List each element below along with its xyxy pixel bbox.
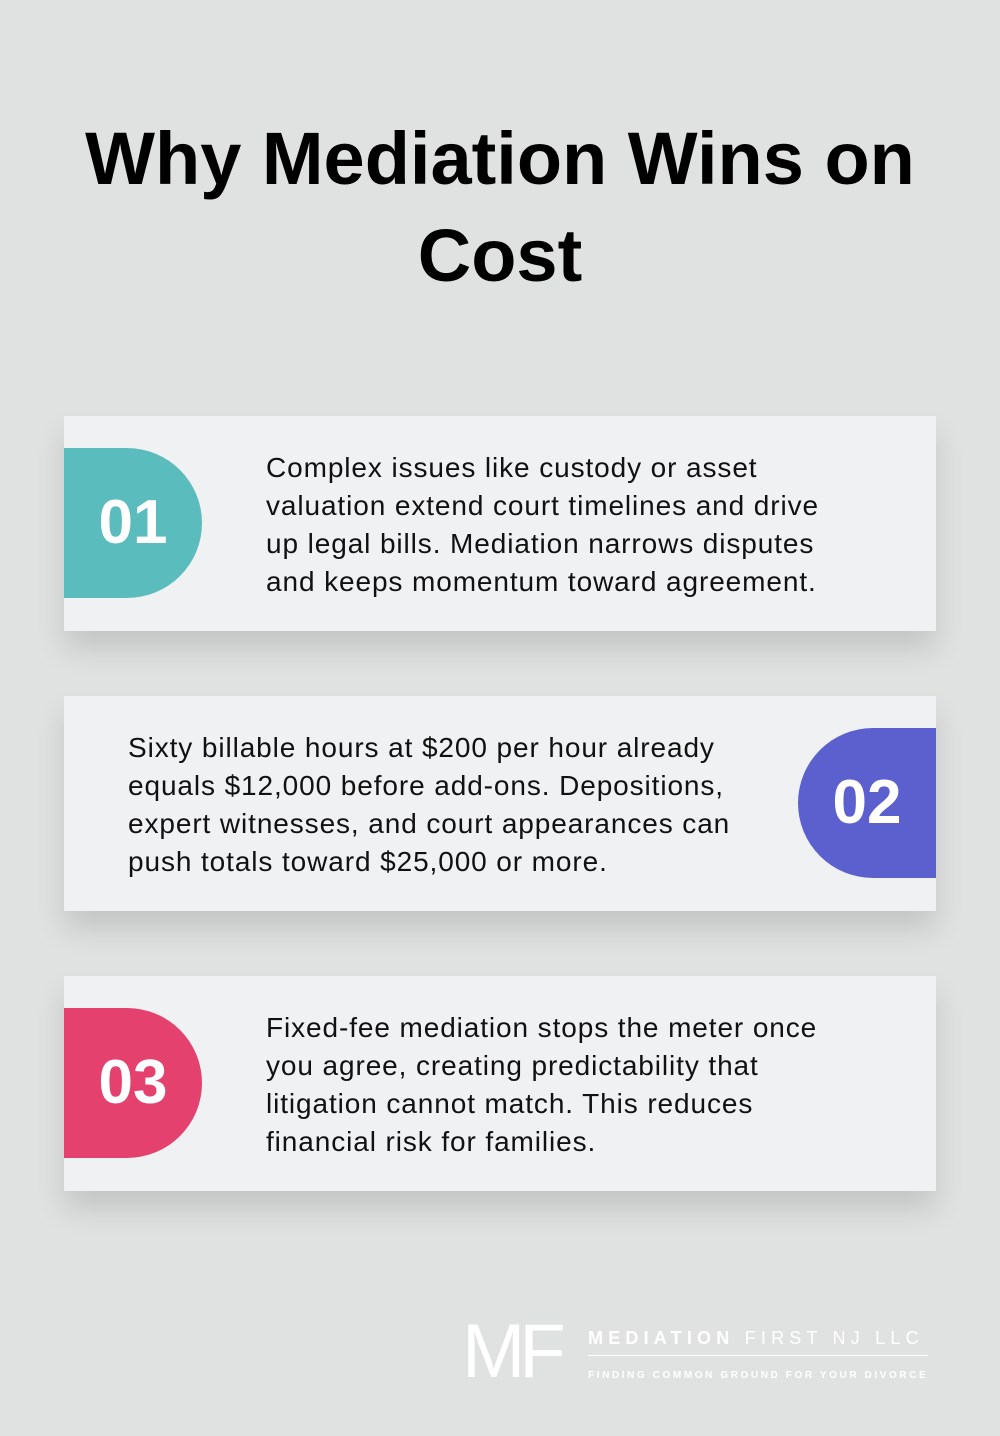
badge 01: 01: [99, 488, 167, 557]
title: Why Mediation Wins on: [85, 117, 915, 200]
badge 02: [798, 728, 936, 878]
text 3: [266, 1012, 817, 1157]
text 1: valuation extend court timelines and drive: [266, 490, 819, 521]
badge 03: [64, 1008, 202, 1158]
title: Cost: [418, 214, 582, 297]
logo: [462, 1309, 928, 1394]
logo tagline: FINDING COMMON GROUND FOR YOUR DIVORCE: [588, 1370, 928, 1381]
panel: card 2: [64, 696, 936, 911]
text 2: [128, 732, 730, 877]
text 2: Sixty billable hours at $200 per hour already: [128, 732, 715, 763]
badge 02: 02: [833, 768, 901, 837]
logo name: MEDIATION FIRST NJ LLC: [588, 1328, 924, 1348]
text 3: litigation cannot match. This reduces: [266, 1088, 753, 1119]
text 1: Complex issues like custody or asset: [266, 452, 757, 483]
panel: card 3: [64, 976, 936, 1191]
text 1: [266, 452, 819, 597]
badge 03: 03: [99, 1048, 167, 1117]
logo mark MF: MF: [462, 1309, 560, 1394]
text 2: equals $12,000 before add-ons. Depositions,: [128, 770, 724, 801]
text 3: Fixed-fee mediation stops the meter once: [266, 1012, 817, 1043]
text 3: you agree, creating predictability that: [266, 1050, 759, 1081]
text 1: up legal bills. Mediation narrows disputes: [266, 528, 814, 559]
badge 01: [64, 448, 202, 598]
text 2: push totals toward $25,000 or more.: [128, 846, 608, 877]
text 1: and keeps momentum toward agreement.: [266, 566, 817, 597]
title: [85, 117, 915, 297]
text 2: expert witnesses, and court appearances can: [128, 808, 730, 839]
text 3: financial risk for families.: [266, 1126, 596, 1157]
panel: card 1: [64, 416, 936, 631]
